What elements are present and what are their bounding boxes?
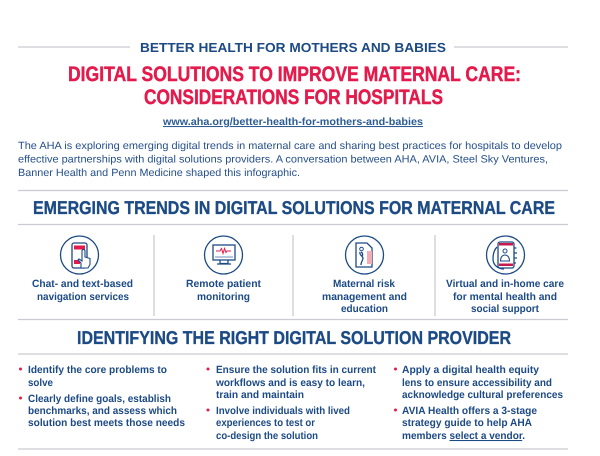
bullets column 3: Apply a digital health equity (402, 364, 539, 376)
label (32, 278, 133, 303)
trend: remote patient monitoring (186, 236, 261, 303)
icon: monitor with pulse (204, 236, 242, 274)
icon: hand holding phone (486, 236, 524, 274)
label: Remote patient (186, 278, 261, 290)
bullets column 3: lens to ensure accessibility and (402, 377, 552, 389)
bullets column 1: solve (28, 377, 53, 389)
intro paragraph: Banner Health and Penn Medicine shaped this infographic. (18, 167, 300, 179)
kicker heading: BETTER HEALTH FOR MOTHERS AND BABIES (140, 40, 446, 55)
trend: maternal risk management (322, 236, 407, 315)
intro paragraph (18, 140, 562, 179)
bullets column 3: acknowledge cultural preferences (402, 389, 563, 401)
intro paragraph: The AHA is exploring emerging digital trends in maternal care and sharing best practices for hospitals to develop (18, 140, 562, 152)
label: management and (322, 291, 407, 303)
bullets column 1: Clearly define goals, establish (28, 393, 171, 405)
bullets column 2: Ensure the solution fits in current (216, 364, 376, 376)
label: social support (471, 303, 539, 315)
label: monitoring (197, 291, 250, 303)
bullets column 2: co-design the solution (216, 430, 318, 442)
bullets column 2: experiences to test or (216, 417, 315, 429)
bullets column 3: strategy guide to help AHA (402, 417, 532, 429)
website link: www.aha.org/better-health-for-mothers-and-babies (162, 116, 423, 128)
trend: chat and text navigation (32, 236, 133, 303)
section heading: right provider: IDENTIFYING THE RIGHT DIGITAL SOLUTION PROVIDER (77, 327, 511, 348)
bullets column 3 (394, 364, 563, 442)
title (68, 63, 521, 109)
bullets column 3: members select a vendor. (402, 430, 525, 442)
trend: virtual and in-home care (446, 236, 564, 315)
bullets column 1: Identify the core problems to (28, 364, 167, 376)
bullets column 1: solution best meets those needs (28, 417, 185, 429)
intro paragraph: effective partnerships with digital solutions providers. A conversation between AHA, AVIA, Steel Sky Ventures, (18, 154, 548, 166)
bullets column 1: benchmarks, and assess which (28, 405, 177, 417)
bullets column 2: Involve individuals with lived (216, 405, 350, 417)
label (446, 278, 564, 315)
bullets column 2: workflows and is easy to learn, (215, 377, 365, 389)
label (186, 278, 261, 303)
bullets column 3: AVIA Health offers a 3-stage (402, 405, 537, 417)
title: DIGITAL SOLUTIONS TO IMPROVE MATERNAL CARE: (68, 63, 521, 86)
bullets column 1 (19, 364, 185, 429)
label: Virtual and in-home care (446, 278, 564, 290)
bullets column 2: train and maintain (216, 389, 304, 401)
title: CONSIDERATIONS FOR HOSPITALS (144, 86, 443, 109)
icon: phone with pointing hand (60, 236, 98, 274)
bullets column 2 (206, 364, 376, 442)
icon: document with pregnant figure (346, 236, 384, 274)
label (322, 278, 407, 315)
label: Chat- and text-based (32, 278, 133, 290)
label: education (341, 303, 388, 315)
label: for mental health and (453, 291, 557, 303)
label: navigation services (37, 291, 129, 303)
label: Maternal risk (333, 278, 395, 290)
